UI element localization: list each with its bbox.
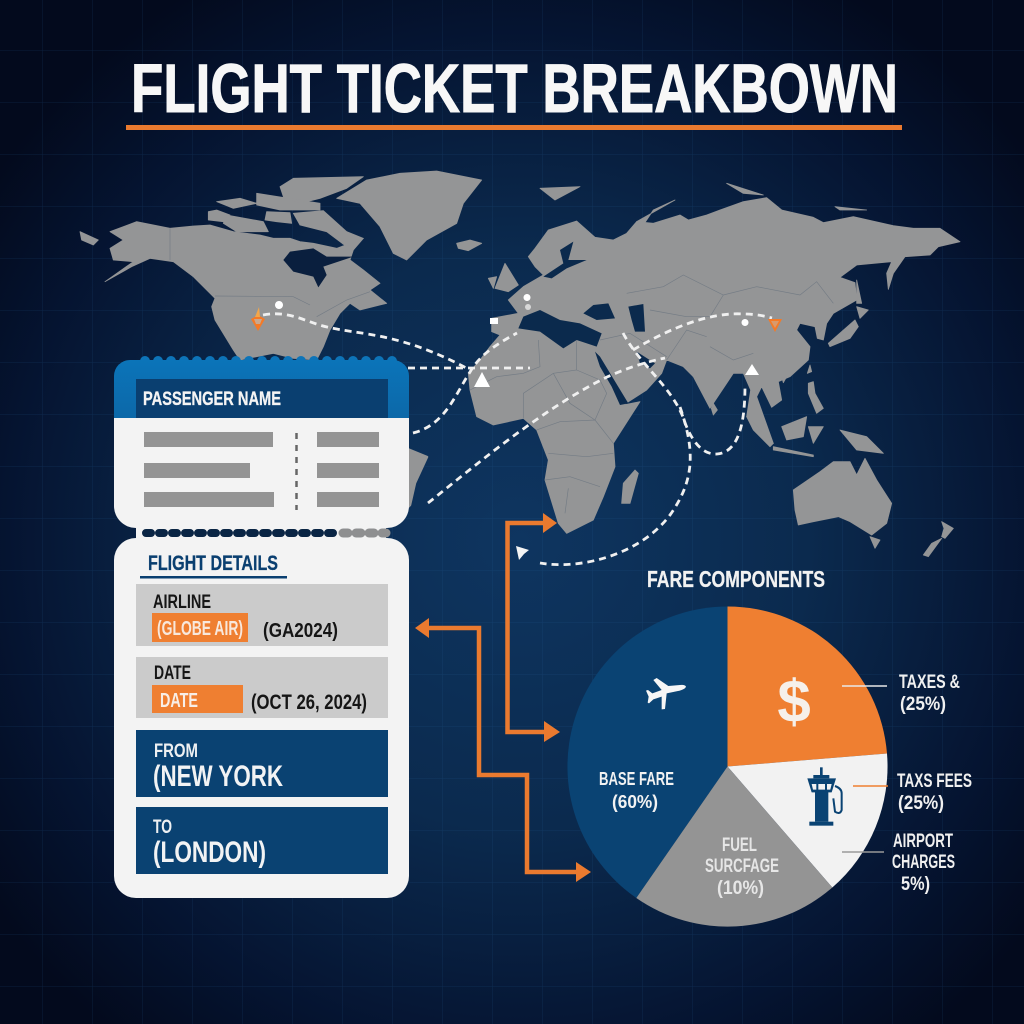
- callout: taxes: (25%): [900, 694, 946, 715]
- flight routes: [251, 294, 782, 565]
- slice: taxes: [728, 606, 887, 766]
- row: airline: AIRLINE: [153, 592, 211, 613]
- panel: boarding pass upper ticket: [114, 360, 409, 528]
- map: south america tip: [405, 448, 427, 510]
- passenger name banner: [136, 379, 388, 418]
- callout: taxes and fees: (25%): [898, 793, 944, 814]
- row: from: FROM: [154, 741, 198, 762]
- map: eurasia, africa and oceania: [468, 183, 960, 557]
- panel: flight details lower ticket: [114, 524, 409, 898]
- row: date: (OCT 26, 2024): [251, 691, 367, 714]
- fare components heading: FARE COMPONENTS: [647, 566, 825, 592]
- connector arrows: [415, 513, 591, 882]
- row: from: (NEW YORK: [153, 760, 283, 793]
- pin: usa: [251, 307, 265, 331]
- row: date: DATE: [160, 690, 198, 712]
- map: north america and greenland: [80, 171, 518, 360]
- route: north america to africa: [263, 314, 470, 370]
- dots: city markers: [275, 294, 749, 326]
- label: base fare: BASE FARE: [599, 769, 674, 789]
- pie chart: [567, 606, 888, 927]
- arrow: flight details and pie stepped line: [415, 618, 591, 882]
- row: from: [136, 730, 388, 797]
- pin: china: [768, 319, 782, 332]
- flight details heading: FLIGHT DETAILS: [148, 552, 278, 575]
- icon: dollar sign: $: [777, 668, 811, 735]
- arrowhead: southern africa: [516, 546, 529, 560]
- ticket body: [114, 418, 409, 528]
- perforation strip: [136, 524, 386, 542]
- title underline: [126, 125, 902, 130]
- callout: taxes and fees: [853, 771, 972, 814]
- row: to: TO: [153, 817, 172, 838]
- route: loop through indian ocean: [623, 333, 745, 454]
- dot: faded city marker: [525, 304, 531, 310]
- callout: airport charges: AIRPORT: [893, 831, 953, 852]
- label: fuel surcharge: [705, 835, 779, 899]
- callout: taxes: TAXES &: [899, 672, 960, 693]
- slice: fuel surcharge: [636, 766, 832, 927]
- route arrowheads and markers: [251, 294, 782, 560]
- label: base fare: (60%): [612, 792, 658, 812]
- route: arabia to china: [633, 314, 772, 350]
- arrowhead: africa: [474, 372, 490, 387]
- label: fuel surcharge: FUEL: [722, 835, 757, 856]
- callout: taxes: [842, 672, 960, 715]
- label: fuel surcharge: SURCFAGE: [705, 856, 779, 877]
- header scallops: [145, 356, 393, 366]
- callout: airport charges: 5%): [901, 874, 930, 895]
- label: fuel surcharge: (10%): [717, 878, 764, 899]
- row: date: DATE: [154, 663, 191, 684]
- icon: plane: [646, 678, 686, 709]
- label: base fare: [599, 769, 674, 812]
- callout: airport charges: [842, 831, 955, 895]
- row: to: (LONDON): [153, 836, 266, 869]
- icon: control tower fuel pump: [807, 767, 842, 826]
- card body: [114, 538, 409, 898]
- callout: taxes and fees: TAXS FEES: [897, 771, 972, 792]
- slice: base fare: [567, 606, 728, 898]
- arrow: map and pie bracket: [508, 513, 560, 742]
- arrowhead: asia: [745, 364, 759, 375]
- route: ticket to spain: [413, 333, 517, 433]
- row: date: [136, 657, 388, 718]
- row: to: [136, 807, 388, 874]
- callout: airport charges: CHARGES: [892, 852, 955, 873]
- slice: airport and fees: [728, 754, 888, 888]
- passenger name banner: PASSENGER NAME: [143, 389, 281, 410]
- ticket header: [114, 360, 409, 420]
- route: long return around africa: [540, 407, 690, 565]
- route: ticket to middle east: [428, 358, 665, 503]
- route: horizontal across atlantic: [408, 367, 530, 369]
- world map: [80, 171, 960, 557]
- placeholder bars: [144, 432, 379, 507]
- row: airline: (GA2024): [263, 620, 338, 642]
- row: airline: [136, 584, 388, 646]
- row: airline: (GLOBE AIR): [157, 618, 243, 640]
